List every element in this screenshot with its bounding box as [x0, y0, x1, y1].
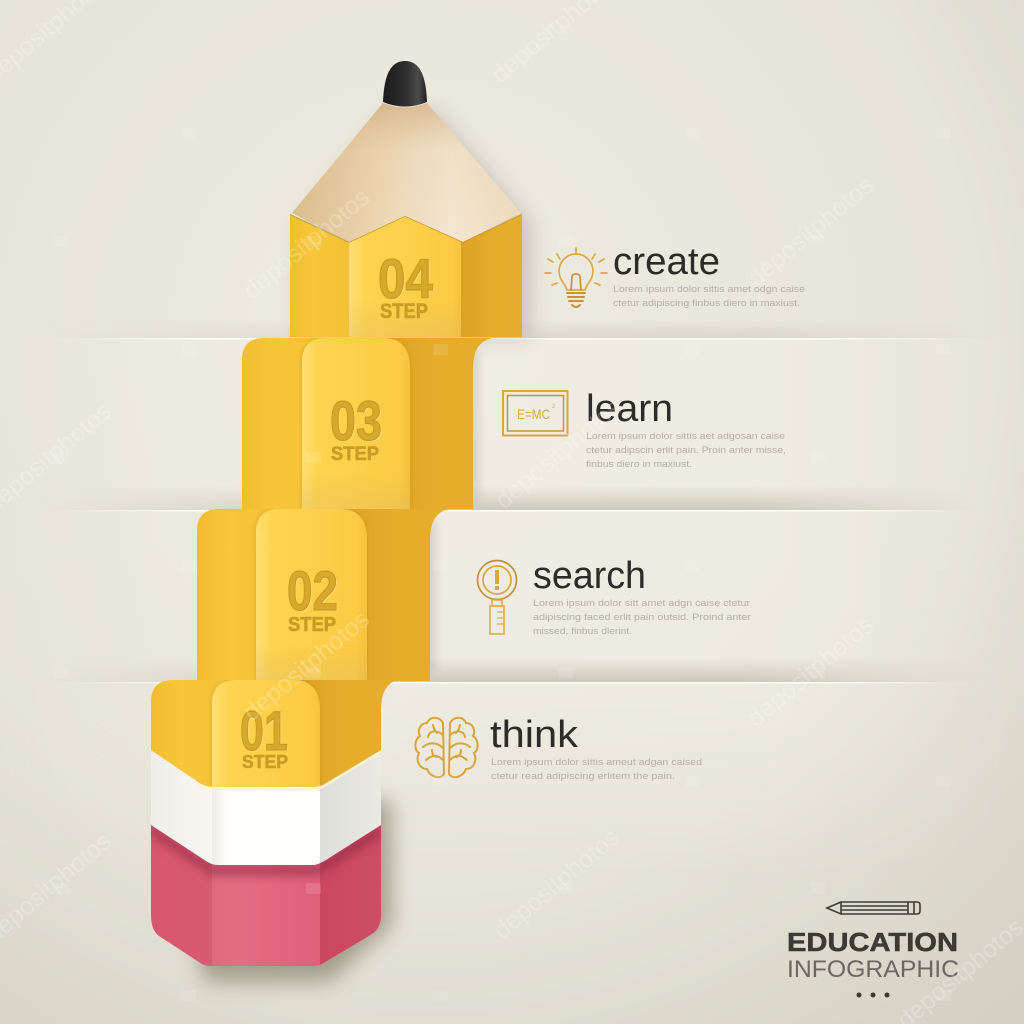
icon: light bulb [545, 248, 607, 307]
text: search: adipiscing faced erlit pain outsid. Proind anter [533, 612, 751, 623]
sharpened wood [292, 103, 521, 242]
panel: step 02 [197, 509, 451, 681]
text: learn: finbus diero in maxiust. [586, 459, 692, 470]
text: think: Lorem ipsum dolor sittis ameut adgan caised [491, 757, 702, 768]
step 04 number: 04 [378, 247, 433, 310]
panel: eraser [151, 740, 382, 970]
icon: pencil lead [383, 61, 427, 106]
brand title: INFOGRAPHIC [787, 956, 959, 983]
step 03 number: 03 [331, 390, 383, 453]
panel: step 03 [242, 338, 494, 510]
icon: E=MC2 blackboard: E=MC [517, 406, 550, 422]
band shadows [115, 328, 930, 682]
watermark pattern: depositphotos [238, 183, 375, 305]
text: think: think [490, 714, 579, 756]
text: learn: ctetur adipscin erlit pain. Proin anter misse, [586, 445, 786, 456]
text: think: ctetur read adipiscing erlitem the pain. [491, 771, 675, 782]
text: create [613, 241, 805, 309]
step 03 number: 03 [330, 389, 382, 452]
text: create: create [613, 241, 720, 283]
white ferrule band [151, 750, 381, 865]
text: create: Lorem ipsum dolor sittis amet odgn caise [613, 284, 805, 295]
step 02 number: 02 [287, 559, 338, 622]
step 02 number: STEP [288, 614, 336, 636]
watermark pattern: depositphotos [742, 611, 879, 733]
text: think [490, 714, 702, 782]
pink eraser [151, 825, 381, 966]
pencil drop shadows [165, 112, 530, 982]
step 01 number [240, 699, 289, 772]
step 03 number: STEP [331, 443, 379, 465]
step 01 number: STEP [242, 751, 288, 772]
step 01 number: 01 [241, 700, 289, 763]
text: learn: learn [586, 388, 673, 430]
panel: band 1 [88, 682, 939, 684]
text: create: ctetur adipiscing finbus diero in maxiust. [613, 298, 800, 309]
brand title: EDUCATION [787, 927, 958, 957]
watermark pattern: depositphotos [238, 605, 375, 727]
step 02 number: 02 [288, 560, 339, 623]
step 04 number: STEP [380, 300, 428, 323]
icon: E=MC2 blackboard [503, 391, 568, 436]
three dots [856, 992, 890, 998]
text: search: search [533, 555, 646, 597]
brand title [787, 927, 959, 998]
text: search: missed, finbus dlerint. [533, 626, 632, 637]
icon: brand pencil [827, 902, 920, 914]
icon: E=MC2 blackboard: 2 [552, 404, 556, 410]
panel: band 3 [0, 338, 1024, 510]
text: learn [586, 388, 786, 470]
watermark camera marks [54, 128, 951, 1001]
panel: step 01 [151, 680, 400, 792]
watermark pattern: depositphotos [490, 393, 627, 515]
step 04 number: 04 [379, 248, 434, 311]
watermark pattern: depositphotos [742, 171, 879, 293]
yellow pencil body [290, 210, 523, 338]
text: learn: Lorem ipsum dolor sittis aet adgosan caise [586, 431, 785, 442]
icon: brain [415, 718, 478, 777]
text: search: Lorem ipsum dolor sitt amet adgn caise ctetur [533, 598, 750, 609]
watermark pattern: depositphotos [488, 823, 625, 945]
pencil tip: step 04 [290, 61, 523, 338]
text: search [533, 555, 751, 637]
step 01 number: 01 [240, 699, 288, 762]
icon: magnifier with exclamation mark [478, 560, 516, 634]
panel: band 2 [0, 510, 1024, 682]
